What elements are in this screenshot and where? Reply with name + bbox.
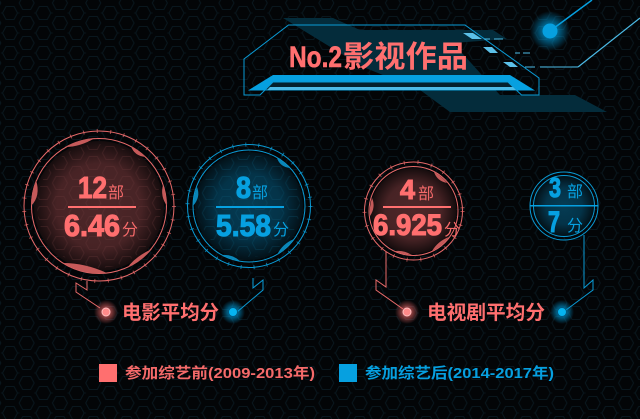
ring (24, 131, 174, 281)
node blue (550, 300, 574, 324)
connector blue (566, 235, 593, 310)
title: 影视作品 (343, 41, 468, 74)
panel: film after: 部 (252, 184, 268, 202)
panel: film after: 分 (273, 221, 289, 239)
panel: TV before: 6.925 (373, 209, 442, 242)
ring (530, 172, 598, 240)
panel: TV before: 部 (418, 185, 434, 203)
title: No.2 (289, 41, 342, 74)
panel: TV after: 部 (567, 183, 583, 201)
ring segments (193, 158, 294, 261)
ring segments (31, 138, 167, 273)
icon: glowing node with lines (530, 0, 640, 67)
label: 电视剧平均分 (427, 302, 545, 324)
panel: film before: 分 (122, 221, 138, 239)
connector red (76, 281, 100, 308)
banner accents (463, 33, 518, 67)
ring (188, 144, 310, 268)
node red (395, 300, 419, 324)
banner heading (244, 18, 607, 112)
banner dashes (484, 39, 578, 67)
legend swatch red (99, 364, 117, 382)
callout: film average (76, 278, 263, 324)
legend label blue: 参加综艺后(2014-2017年) (365, 364, 554, 382)
callout: TV average (376, 235, 593, 324)
panel: TV before: 分 (444, 221, 460, 239)
value: 4 (400, 174, 415, 205)
banner thick bar (248, 75, 535, 90)
value: 8 (236, 170, 251, 205)
node red (94, 300, 118, 324)
node blue (221, 300, 245, 324)
ring (364, 162, 462, 260)
panel: film before (24, 131, 174, 281)
panel: TV before (364, 162, 462, 260)
legend label red: 参加综艺前(2009-2013年) (125, 364, 315, 382)
banner shadow band (283, 18, 607, 112)
panel: TV after: 7 (548, 206, 560, 239)
legend swatch blue (339, 364, 357, 382)
title (289, 41, 468, 74)
panel: film after: 5.58 (216, 208, 271, 243)
legend (99, 364, 554, 382)
connector red (376, 252, 403, 309)
panel: film before: 6.46 (64, 208, 120, 243)
panel: film before: 部 (108, 184, 124, 202)
value: 3 (549, 172, 561, 203)
value: 12 (78, 170, 107, 205)
panel: TV after (530, 172, 598, 240)
panel: film after (188, 144, 310, 268)
connector blue (237, 278, 263, 312)
ring segments (370, 172, 449, 255)
label: 电影平均分 (122, 302, 219, 324)
banner outline (244, 25, 539, 95)
panel: TV after: 分 (567, 217, 583, 235)
